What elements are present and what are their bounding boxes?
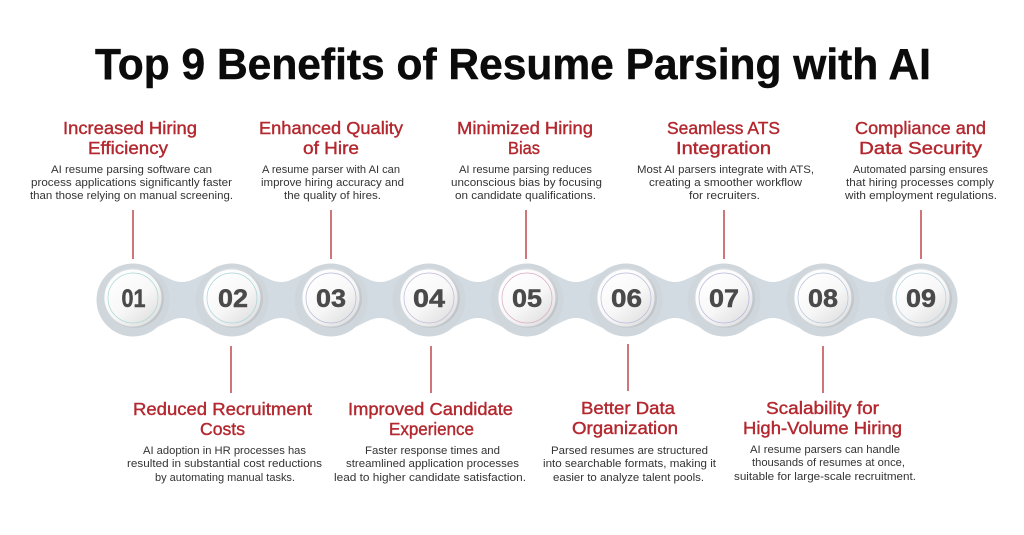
benefit 9: Compliance and Data Security bbox=[844, 118, 997, 259]
benefit 3: Enhanced Quality of Hire bbox=[259, 118, 404, 259]
benefit 6: Better Data Organization: Organization bbox=[572, 418, 678, 438]
node 02 bbox=[196, 264, 268, 336]
benefit 7: Seamless ATS Integration: creating a smoother workflow bbox=[649, 177, 803, 189]
benefit 4: Improved Candidate Experience: Experience bbox=[389, 419, 474, 439]
node 06: 06 bbox=[611, 285, 642, 313]
benefit 7: Seamless ATS Integration: Most AI parsers integrate with ATS, bbox=[637, 164, 814, 176]
benefit 3: Enhanced Quality of Hire: Enhanced Quality bbox=[259, 118, 403, 138]
node 03 bbox=[294, 264, 368, 336]
benefit 6: Better Data Organization: Parsed resumes are structured bbox=[551, 445, 708, 457]
benefit 1: Increased Hiring Efficiency: than those relying on manual screening. bbox=[30, 190, 233, 202]
benefit 9: Compliance and Data Security: Data Security bbox=[859, 138, 982, 158]
chain of numbered circles bbox=[96, 264, 958, 336]
node 05: 05 bbox=[512, 285, 542, 313]
benefit 9: Compliance and Data Security: Compliance and bbox=[855, 118, 986, 138]
benefit 2: Reduced Recruitment Costs: by automating manual tasks. bbox=[155, 472, 295, 484]
node 02: 02 bbox=[218, 285, 248, 313]
benefit 9: Compliance and Data Security: that hiring processes comply bbox=[846, 177, 994, 189]
benefit 1: Increased Hiring Efficiency: process applications significantly faster bbox=[31, 177, 232, 189]
benefit 3: Enhanced Quality of Hire: A resume parser with AI can bbox=[262, 164, 400, 176]
benefit 5: Minimized Hiring Bias: Bias bbox=[508, 138, 540, 158]
benefit 1: Increased Hiring Efficiency: Efficiency bbox=[88, 138, 168, 158]
node 05 bbox=[490, 264, 564, 336]
node 08: 08 bbox=[808, 285, 838, 313]
benefit 6: Better Data Organization: easier to analyze talent pools. bbox=[553, 472, 704, 484]
benefit 8: Scalability for High-Volume Hiring bbox=[734, 346, 916, 483]
benefit 7: Seamless ATS Integration: Integration bbox=[676, 138, 771, 158]
node 03: 03 bbox=[316, 285, 346, 313]
benefit 5: Minimized Hiring Bias: on candidate qualifications. bbox=[455, 190, 596, 202]
benefit 8: Scalability for High-Volume Hiring: High-Volume Hiring bbox=[743, 418, 902, 438]
benefit 2: Reduced Recruitment Costs: AI adoption in HR processes has bbox=[143, 445, 306, 457]
benefit 9: Compliance and Data Security: with employment regulations. bbox=[844, 190, 997, 202]
benefit 1: Increased Hiring Efficiency: Increased Hiring bbox=[63, 118, 197, 138]
benefit 2: Reduced Recruitment Costs: Reduced Recruitment bbox=[133, 399, 312, 419]
benefit 7: Seamless ATS Integration: for recruiters. bbox=[689, 190, 760, 202]
title: Top 9 Benefits of Resume Parsing with AI bbox=[95, 40, 931, 89]
node 01 bbox=[96, 264, 170, 336]
benefit 4: Improved Candidate Experience: Improved Candidate bbox=[348, 399, 513, 419]
benefit 4: Improved Candidate Experience: lead to higher candidate satisfaction. bbox=[334, 472, 526, 484]
benefit 8: Scalability for High-Volume Hiring: suitable for large-scale recruitment. bbox=[734, 471, 916, 483]
benefit 9: Compliance and Data Security: Automated parsing ensures bbox=[853, 164, 988, 176]
node 04 bbox=[392, 264, 466, 336]
benefit 8: Scalability for High-Volume Hiring: Scalability for bbox=[766, 398, 879, 418]
benefit 8: Scalability for High-Volume Hiring: AI resume parsers can handle bbox=[750, 444, 900, 456]
node 09: 09 bbox=[906, 285, 936, 313]
benefit 1: Increased Hiring Efficiency bbox=[30, 118, 233, 259]
benefit 5: Minimized Hiring Bias bbox=[451, 118, 602, 259]
benefit 3: Enhanced Quality of Hire: the quality of hires. bbox=[284, 190, 381, 202]
benefit 4: Improved Candidate Experience: Faster response times and bbox=[365, 445, 500, 457]
node 08 bbox=[786, 264, 860, 336]
node 01: 01 bbox=[122, 285, 146, 313]
benefit 2: Reduced Recruitment Costs: Costs bbox=[200, 419, 245, 439]
node 07 bbox=[688, 264, 760, 336]
node 04: 04 bbox=[413, 285, 445, 313]
benefit 8: Scalability for High-Volume Hiring: thousands of resumes at once, bbox=[752, 457, 905, 469]
benefit 5: Minimized Hiring Bias: AI resume parsing reduces bbox=[459, 164, 592, 176]
benefit 1: Increased Hiring Efficiency: AI resume parsing software can bbox=[51, 164, 212, 176]
node 07: 07 bbox=[709, 285, 739, 313]
benefit 6: Better Data Organization: into searchable formats, making it bbox=[543, 458, 717, 470]
benefit 4: Improved Candidate Experience bbox=[334, 346, 526, 484]
benefit 6: Better Data Organization bbox=[543, 344, 717, 484]
benefit 6: Better Data Organization: Better Data bbox=[581, 398, 675, 418]
benefit 3: Enhanced Quality of Hire: improve hiring accuracy and bbox=[261, 177, 404, 189]
benefit 5: Minimized Hiring Bias: Minimized Hiring bbox=[457, 118, 593, 138]
benefit 2: Reduced Recruitment Costs: resulted in substantial cost reductions bbox=[127, 458, 322, 470]
node 06 bbox=[590, 264, 662, 336]
benefit 5: Minimized Hiring Bias: unconscious bias by focusing bbox=[451, 177, 602, 189]
benefit 7: Seamless ATS Integration: Seamless ATS bbox=[667, 118, 780, 138]
benefit 3: Enhanced Quality of Hire: of Hire bbox=[303, 138, 359, 158]
benefit 2: Reduced Recruitment Costs bbox=[127, 346, 322, 484]
node 09 bbox=[884, 264, 958, 336]
benefit 4: Improved Candidate Experience: streamlined application processes bbox=[346, 458, 519, 470]
benefit 7: Seamless ATS Integration bbox=[637, 118, 814, 259]
